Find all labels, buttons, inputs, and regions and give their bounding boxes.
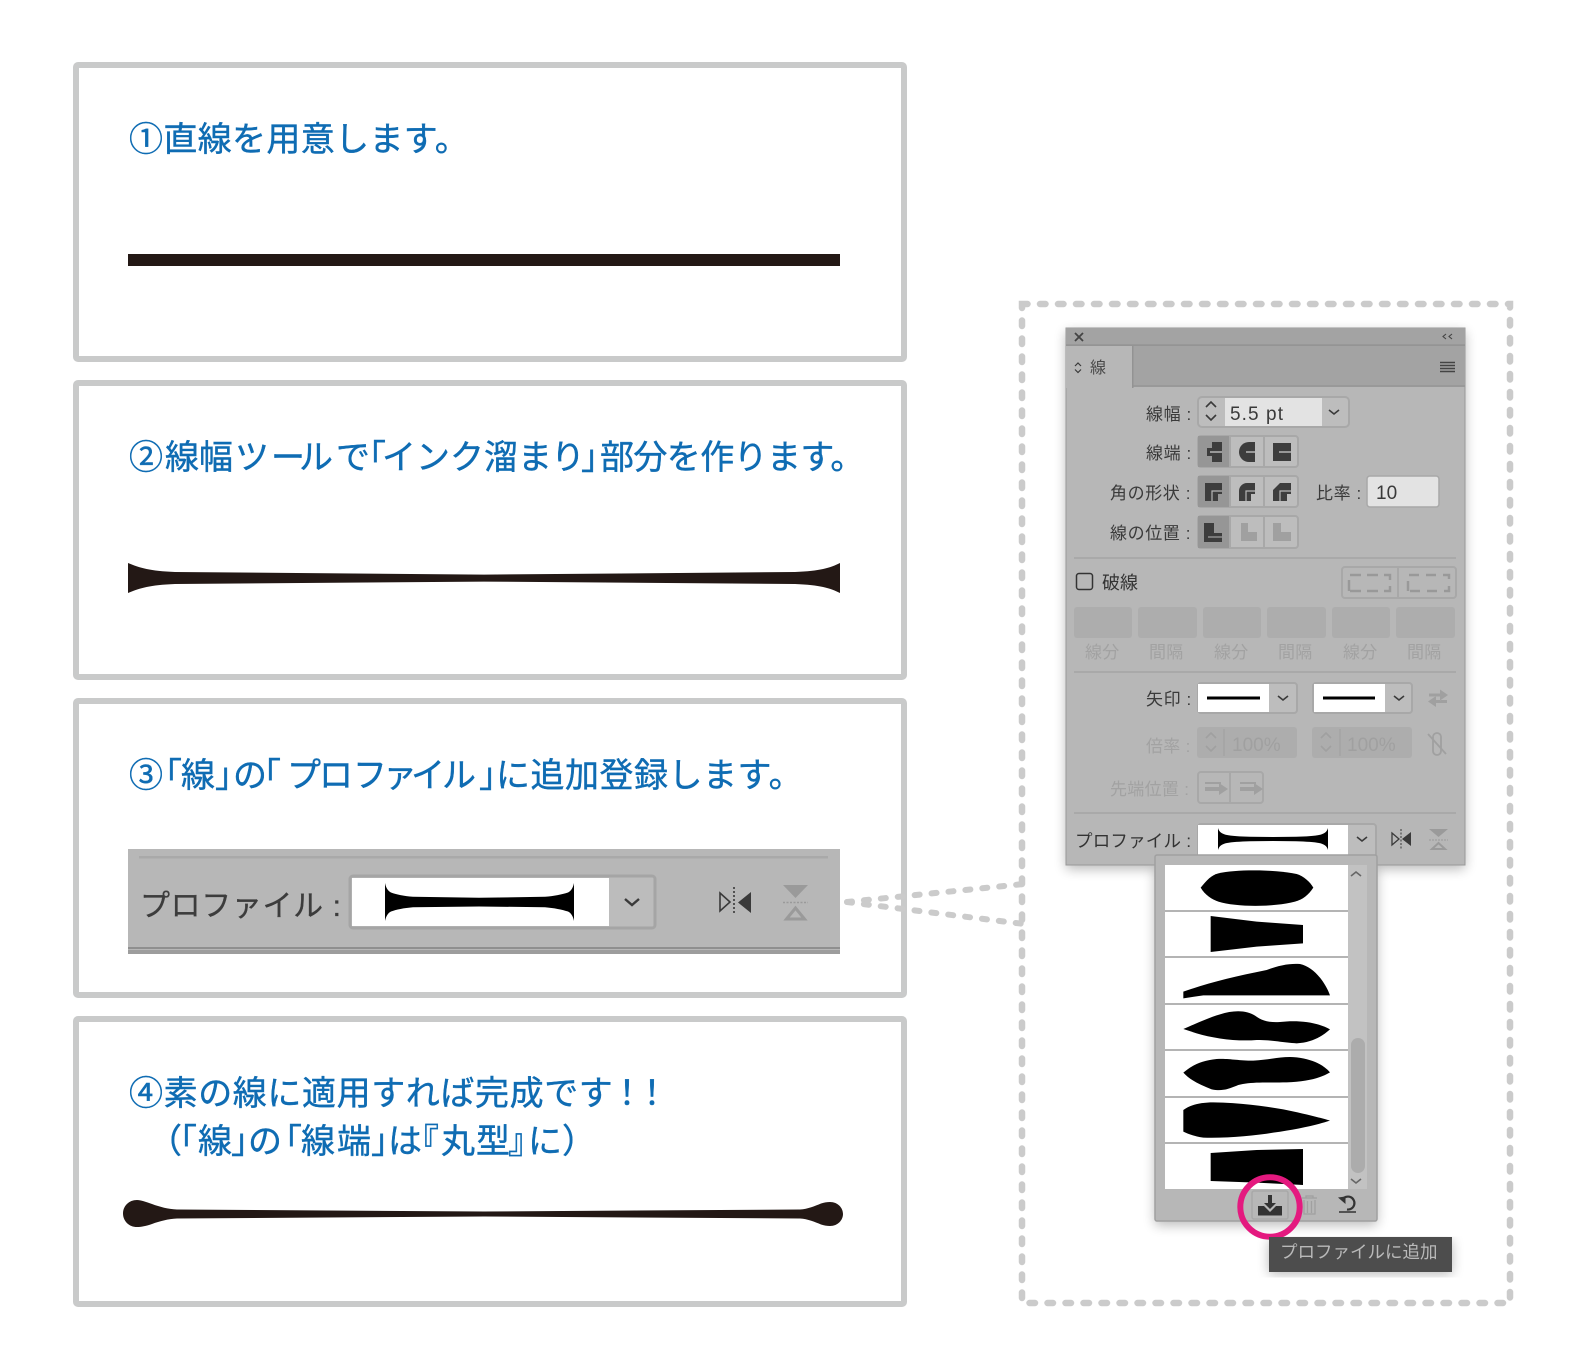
heading: step 1: ①直線を用意します。 — [129, 121, 469, 159]
heading: step 3: 「 — [148, 757, 182, 795]
heading: step 4: 「 — [163, 1123, 197, 1161]
dash and gap fields: 線分 — [1214, 643, 1249, 662]
tab: stroke: 線 — [1090, 359, 1106, 377]
row: dashed line toggle — [1076, 567, 1456, 598]
row: dashed line toggle: 破線 — [1102, 573, 1138, 593]
heading: step 3: ル — [442, 757, 476, 795]
heading: step 4: は — [388, 1123, 422, 1161]
row: cap: 線端 : — [1146, 444, 1192, 463]
tooltip: プロファイルに追加 — [1280, 1242, 1438, 1262]
row: stroke weight: 線幅 : — [1146, 405, 1192, 424]
heading: step 2: 線 — [165, 439, 199, 477]
heading: step 4: 「 — [268, 1123, 302, 1161]
profile dropdown list — [1155, 855, 1377, 1221]
row: profile — [1075, 824, 1448, 857]
heading: step 3: 線 — [181, 757, 215, 795]
icon: panel menu — [1440, 362, 1455, 372]
row: stroke weight — [1146, 397, 1349, 427]
icon: flip across — [783, 885, 808, 919]
dash and gap fields: 間隔 — [1278, 643, 1313, 662]
straight line sample — [128, 254, 840, 266]
line with rounded ends — [123, 1200, 843, 1227]
panel: step 3 — [76, 701, 904, 995]
heading: step 2: で — [336, 439, 370, 477]
dash and gap fields: 線分 — [1343, 643, 1378, 662]
heading: step 4: に — [528, 1123, 562, 1161]
add-to-profile button — [1252, 1191, 1288, 1219]
drop shadows — [1066, 332, 1465, 1274]
row: corner and miter limit — [1110, 476, 1439, 507]
heading: step 4: ） — [562, 1123, 596, 1161]
stroke panel UI — [1066, 328, 1465, 865]
heading: step 3: フ — [353, 757, 387, 795]
heading: step 2: ま — [518, 439, 552, 477]
heading: step 4: 」 — [231, 1123, 265, 1161]
tab: stroke — [1066, 346, 1134, 388]
heading: step 2: 」 — [581, 439, 615, 477]
heading: step 4: （ — [148, 1123, 182, 1161]
heading: step 2: ツ — [235, 439, 269, 477]
heading: step 3: 」 — [215, 757, 249, 795]
heading: step 4: ！ — [610, 1075, 644, 1113]
row: profile: プロファイル : — [1075, 831, 1191, 851]
title bar — [1066, 328, 1465, 387]
heading: step 4: 線 — [198, 1123, 232, 1161]
profile bar enlarged — [128, 849, 840, 954]
row: arrowheads — [1146, 683, 1448, 713]
dashed connector lines — [847, 884, 1024, 924]
heading: step 4: 『 — [405, 1123, 439, 1161]
heading: step 3: 「 — [247, 757, 281, 795]
row: stroke weight: 5.5 pt — [1230, 404, 1284, 425]
row: cap — [1146, 436, 1298, 467]
heading: step 4: 線 — [301, 1123, 335, 1161]
row: corner and miter limit: 比率 : — [1316, 484, 1362, 503]
row: corner and miter limit: 10 — [1376, 483, 1397, 504]
dash and gap fields: 線分 — [1085, 643, 1120, 662]
heading: step 4: 丸 — [441, 1123, 475, 1161]
heading: step 2: イ — [382, 439, 416, 477]
row: arrowheads: 矢印 : — [1146, 690, 1192, 709]
heading: step 3: プ — [287, 757, 321, 795]
profile dropdown — [350, 876, 655, 928]
heading: step 2: ル — [299, 439, 333, 477]
heading: step 2: ー — [271, 439, 305, 477]
heading: step 4 — [129, 1075, 669, 1161]
heading: step 4: ！ — [635, 1075, 669, 1113]
heading: step 2: 幅 — [199, 439, 233, 477]
row: scale: 倍率 : — [1146, 737, 1191, 756]
heading: step 3: ロ — [319, 757, 353, 795]
heading: step 2: ク — [450, 439, 484, 477]
highlight circle — [1240, 1177, 1300, 1237]
heading: step 3: 」 — [479, 757, 513, 795]
heading: step 4: ④素の線に適用すれば完成です — [129, 1075, 613, 1113]
heading: step 2: 部分を作ります。 — [600, 439, 864, 477]
panel: step 1 — [76, 65, 904, 359]
heading: step 3: イ — [411, 757, 445, 795]
row: scale — [1146, 727, 1446, 758]
dash and gap fields: 間隔 — [1407, 643, 1442, 662]
heading: step 2: ン — [416, 439, 450, 477]
heading: step 2: 「 — [352, 439, 386, 477]
row: scale: 100% — [1347, 735, 1396, 756]
heading: step 3: の — [233, 757, 267, 795]
row: align stroke — [1110, 516, 1298, 548]
row: align stroke: 線の位置 : — [1110, 524, 1191, 543]
panel: step 4 — [76, 1019, 904, 1304]
heading: step 4: 型 — [476, 1123, 510, 1161]
icon: reset — [1338, 1196, 1356, 1212]
list of width profiles — [1165, 865, 1367, 1189]
panel: step 2 — [76, 383, 904, 677]
heading: step 4: 」 — [371, 1123, 405, 1161]
row: arrow position: 先端位置 : — [1110, 780, 1189, 799]
row: scale: 100% — [1232, 735, 1281, 756]
dashed frame around panel — [1022, 304, 1510, 1303]
heading: step 4: 端 — [337, 1123, 371, 1161]
heading: step 2: 溜 — [484, 439, 518, 477]
icon: flip along — [720, 887, 751, 915]
line with ink-trap ends — [128, 563, 840, 593]
heading: step 4: 』 — [508, 1123, 542, 1161]
heading: step 3: に追加登録します。 — [496, 757, 803, 795]
icon: delete — [1302, 1196, 1317, 1214]
profile label: プロファイル : — [140, 890, 341, 923]
dash and gap fields — [1074, 607, 1455, 662]
heading: step 2: り — [551, 439, 585, 477]
heading: step 2: ② — [129, 439, 163, 477]
row: arrow position — [1110, 772, 1263, 803]
dash and gap fields: 間隔 — [1149, 643, 1184, 662]
heading: step 4: の — [248, 1123, 282, 1161]
tooltip — [1269, 1237, 1452, 1272]
heading: step 3: ァ — [383, 757, 417, 795]
heading: step 3: ③ — [129, 757, 163, 795]
row: corner and miter limit: 角の形状 : — [1110, 484, 1191, 503]
